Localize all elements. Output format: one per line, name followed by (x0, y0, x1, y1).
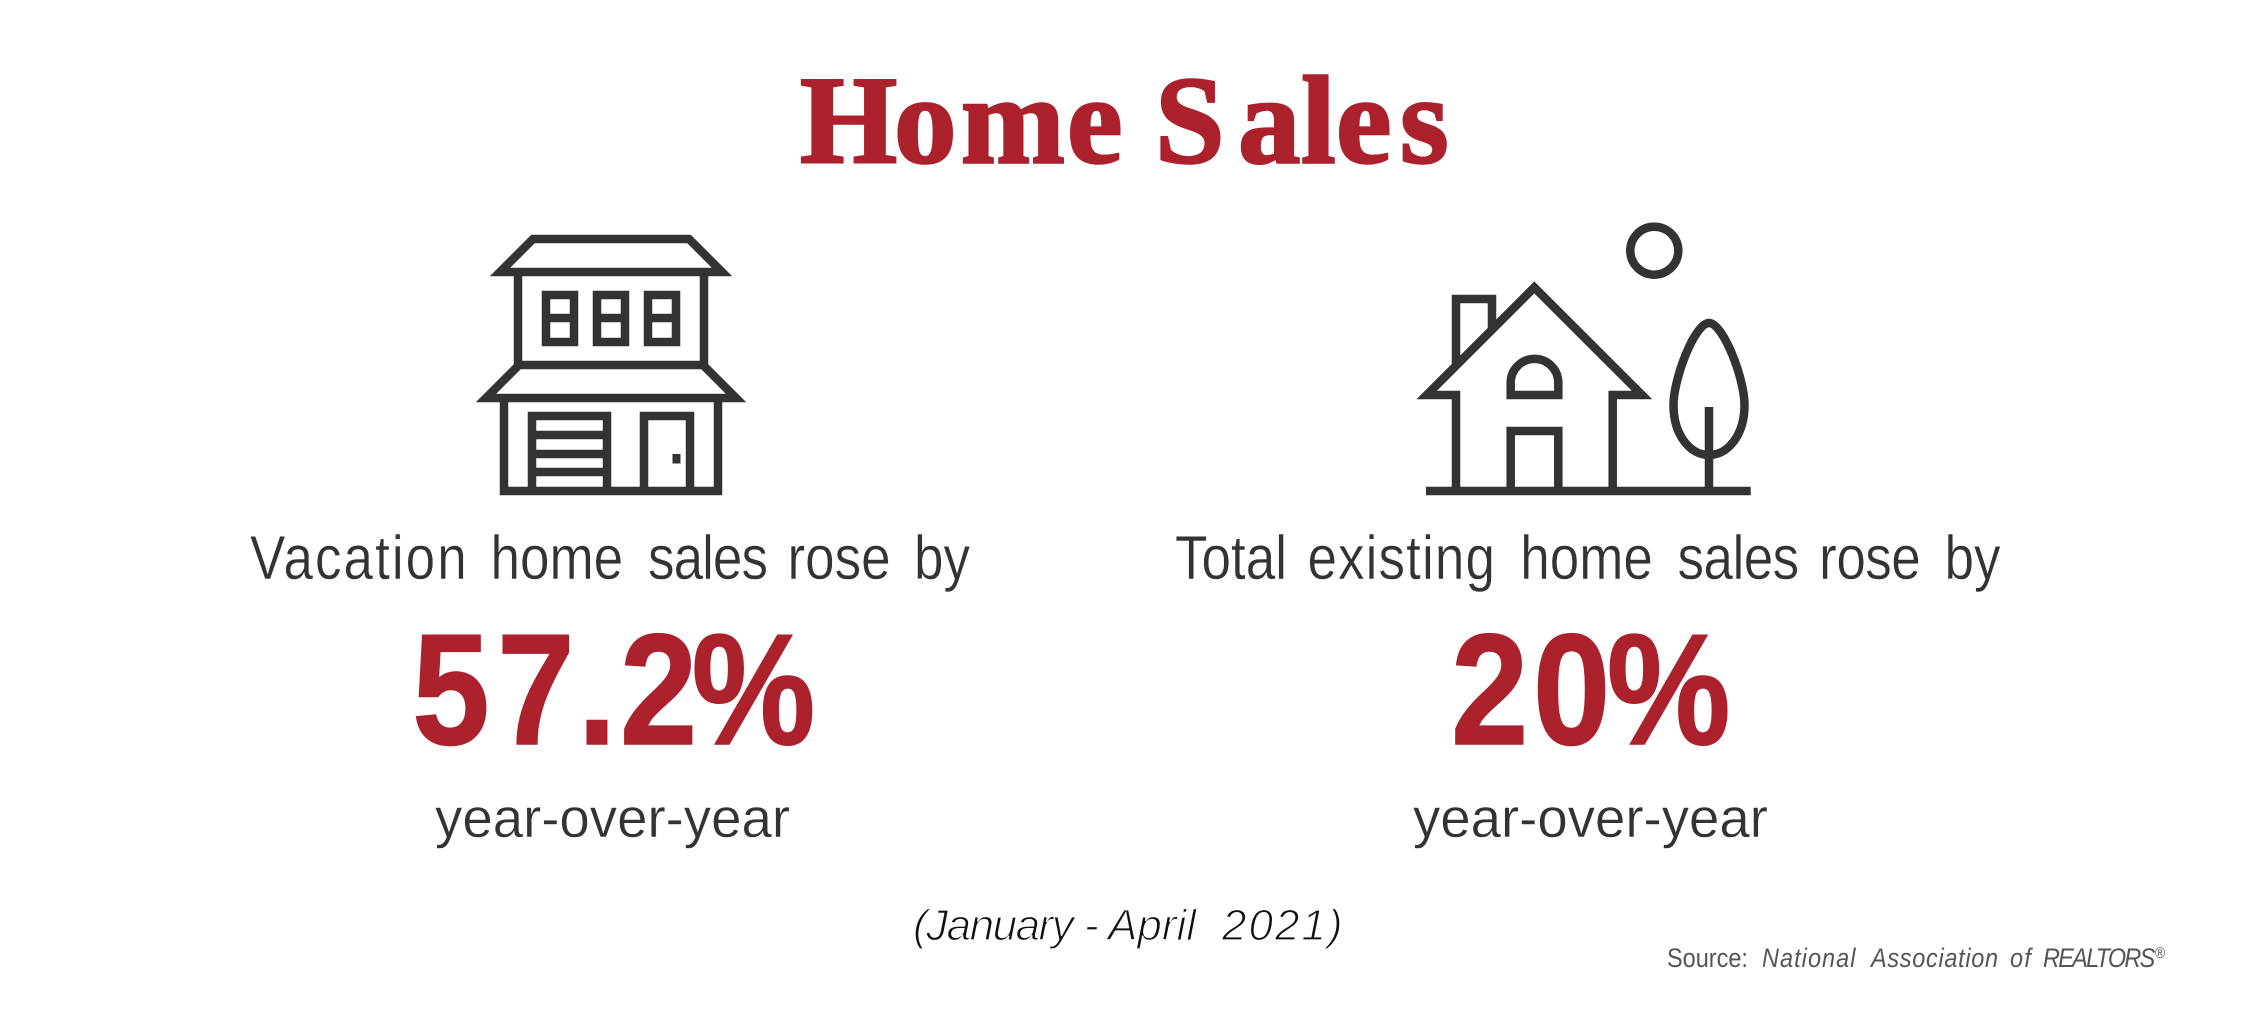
label: total existing home sales: home (1520, 524, 1653, 593)
stat: 57.2%: 57.2% (412, 601, 815, 778)
label: vacation home sales: Vacation (250, 524, 469, 593)
source credit: National (1762, 944, 1857, 973)
label: total existing home sales: existing (1307, 524, 1496, 593)
source credit: of (2010, 944, 2034, 973)
source credit: Source: (1667, 944, 1748, 973)
date range note: - (1084, 901, 1099, 950)
label: vacation home sales: by (914, 524, 970, 593)
date range note: April (1105, 901, 1197, 950)
title: Home Sales (800, 53, 1449, 191)
date range note: 2021) (1221, 901, 1345, 950)
label: total existing home sales: rose (1819, 524, 1920, 593)
label: vacation home sales: home (491, 524, 623, 593)
panel: total existing home sales (1175, 227, 2001, 849)
label: vacation home sales: rose (787, 524, 891, 593)
icon: two-storey house with garage (486, 239, 736, 491)
panel: vacation home sales (250, 239, 970, 849)
source credit: ® (2155, 944, 2165, 962)
source credit: Association (1869, 944, 1999, 973)
date range note: (January (913, 901, 1077, 950)
stat: 20%: 20% (1451, 601, 1731, 778)
label: vacation home sales: sales (648, 524, 767, 593)
label: total existing home sales: sales (1678, 524, 1799, 593)
label: total existing home sales: Total (1175, 524, 1287, 593)
caption: year-over-year: year-over-year (435, 786, 790, 849)
source credit: REALTORS (2043, 944, 2155, 973)
label: total existing home sales: by (1945, 524, 2001, 593)
caption: year-over-year: year-over-year (1413, 786, 1768, 849)
icon: house with tree and sun (1426, 227, 1751, 491)
